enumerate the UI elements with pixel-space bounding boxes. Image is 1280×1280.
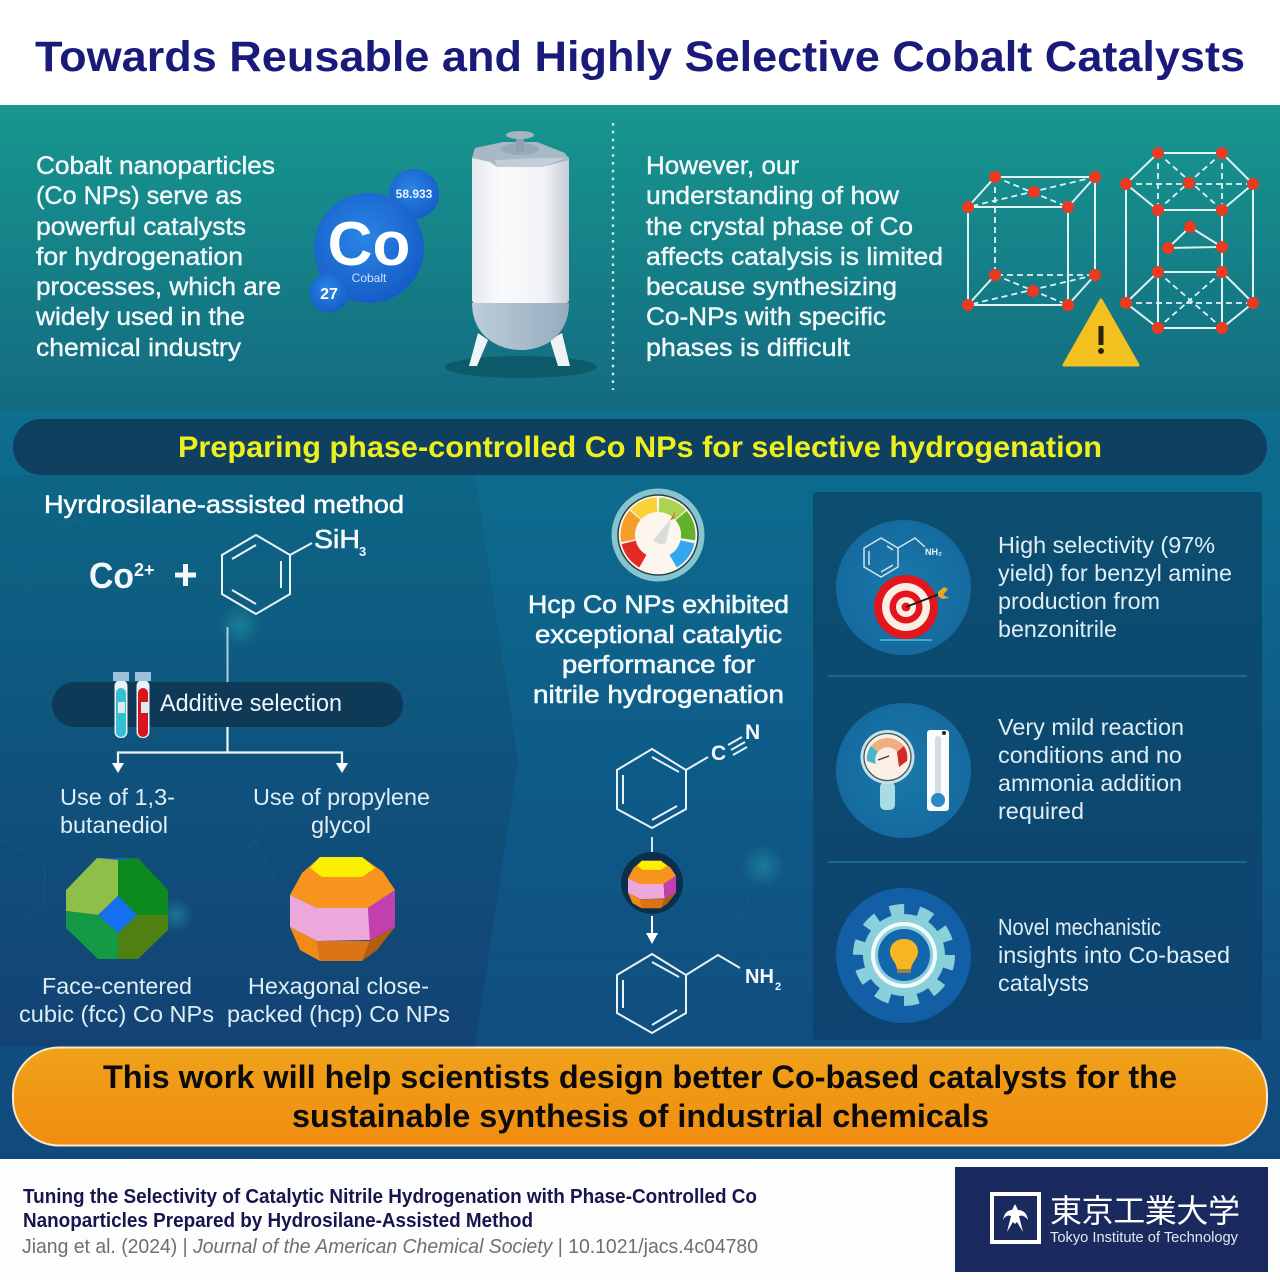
heading bar: preparing phase-controlled Co NPs: Preparing phase-controlled Co NPs for selective hydrogenation [178,431,1102,464]
reagents: Co2+ and phenylsilane [89,524,366,614]
text block: high selectivity [998,532,1232,642]
molecule: benzylamine: 2 [775,981,781,993]
icon: test tubes [113,672,151,738]
icon: cobalt element: Co [328,210,410,279]
text block: mechanistic insights: Novel mechanistic [998,914,1161,940]
label: hcp Co NPs [227,973,450,1027]
text block: mechanistic insights [998,914,1230,996]
text block: mild conditions [998,714,1184,824]
icon: hcp nanoparticle [290,857,395,961]
label: fcc Co NPs: cubic (fcc) Co NPs [19,1001,214,1027]
banner: conclusion: This work will help scientists design better Co-based catalysts for the [103,1059,1177,1095]
logo: Tokyo Institute of Technology: 東京工業大学 [1050,1193,1240,1229]
pill: additive selection: Additive selection [160,690,342,717]
dotted divider [612,123,614,390]
molecule: benzylamine [617,954,781,1033]
banner: conclusion [13,1048,1267,1146]
text block: mild conditions: required [998,798,1084,824]
icon: hcp crystal lattice [1120,147,1259,334]
title: Towards Reusable and Highly Selective Cobalt Catalysts [35,33,1245,81]
text block: high selectivity: yield) for benzyl amine [998,560,1232,586]
icon: performance gauge [612,488,704,582]
text block: cobalt nanoparticles: powerful catalysts [36,213,246,241]
label: fcc Co NPs [19,973,214,1027]
text block: mild conditions: conditions and no [998,742,1182,768]
text block: high selectivity: benzonitrile [998,616,1117,642]
reaction arrow [646,916,658,944]
citation [22,1186,758,1258]
panel: catalytic performance [528,488,789,1033]
panel: key outcomes [813,492,1262,1040]
text block: cobalt nanoparticles [35,152,281,362]
heading: method: Hyrdrosilane-assisted method [44,491,404,519]
label: propylene glycol: glycol [311,812,371,838]
banner: conclusion: sustainable synthesis of industrial chemicals [292,1098,989,1134]
label: 1,3-butanediol: Use of 1,3- [60,784,175,810]
text block: mild conditions: Very mild reaction [998,714,1184,740]
text block: mechanistic insights: insights into Co-based [998,942,1230,968]
icon: selectivity target: NH₂ [925,547,942,557]
icon: cobalt element: 58.933 [396,187,433,201]
text block: exceptional performance [528,591,789,709]
icon: pressure gauge and thermometer [836,703,971,838]
reaction stem line [651,837,653,853]
text block: exceptional performance: exceptional catalytic [535,621,782,649]
icon: cobalt element [310,169,439,312]
connector line [226,627,228,683]
text block: limited understanding: phases is difficult [646,334,850,362]
label: hcp Co NPs: Hexagonal close- [248,973,429,999]
text block: cobalt nanoparticles: (Co NPs) serve as [36,182,242,210]
label: hcp Co NPs: packed (hcp) Co NPs [227,1001,450,1027]
white title band [0,0,1280,105]
citation: Nanoparticles Prepared by Hydrosilane-Assisted Method [23,1210,533,1232]
panel: background and problem [0,105,1280,410]
text block: cobalt nanoparticles: chemical industry [36,334,242,362]
text block: cobalt nanoparticles: processes, which are [36,273,281,301]
icon: gear and light bulb [836,888,971,1023]
text block: limited understanding: However, our [646,152,799,180]
icon: reactor vessel [445,131,597,378]
label: 1,3-butanediol [60,784,175,838]
heading bar: preparing phase-controlled Co NPs [13,419,1267,475]
text block: limited understanding: the crystal phase of Co [646,213,913,241]
citation: Tuning the Selectivity of Catalytic Nitrile Hydrogenation with Phase-Controlled Co [23,1186,757,1208]
text block: exceptional performance: Hcp Co NPs exhibited [528,591,789,619]
text block: mild conditions: ammonia addition [998,770,1182,796]
icon: warning triangle [1064,300,1138,365]
text block: limited understanding: understanding of how [646,182,900,210]
footer band [0,1159,1280,1280]
panel: method and results background [0,410,1280,1160]
reagents: Co2+ and phenylsilane: SiH [314,524,360,554]
icon: fcc nanoparticle [66,858,168,959]
logo: Tokyo Institute of Technology [955,1167,1268,1272]
reagents: Co2+ and phenylsilane: 3 [359,544,366,559]
text block: mechanistic insights: catalysts [998,970,1089,996]
molecule: benzonitrile [617,721,760,828]
text block: limited understanding: affects catalysis is limited [646,243,943,271]
icon: selectivity target [836,520,971,655]
label: propylene glycol: Use of propylene [253,784,430,810]
molecule: benzylamine: NH [745,966,774,988]
text block: cobalt nanoparticles: Cobalt nanoparticles [36,152,275,180]
text block: high selectivity: production from [998,588,1160,614]
text block: exceptional performance: performance for [562,651,755,679]
branching arrows [112,727,348,773]
panel: hydrosilane-assisted method [19,491,450,1027]
citation: Jiang et al. (2024) | Journal of the American Chemical Society | 10.1021/jacs.4c04780 [22,1236,758,1258]
text block: cobalt nanoparticles: for hydrogenation [36,243,243,271]
icon: hcp catalyst particle [621,852,683,914]
text block: limited understanding: because synthesizing [646,273,897,301]
label: 1,3-butanediol: butanediol [60,812,168,838]
text block: limited understanding: Co-NPs with specific [646,303,886,331]
icon: cobalt element: Cobalt [352,271,387,285]
text block: high selectivity: High selectivity (97% [998,532,1215,558]
text block: cobalt nanoparticles: widely used in the [35,303,245,331]
reagents: Co2+ and phenylsilane: Co [89,555,134,596]
text block: limited understanding [646,152,943,362]
molecule: benzonitrile: N [745,721,760,744]
label: fcc Co NPs: Face-centered [42,973,192,999]
pill: additive selection [52,682,403,727]
logo: Tokyo Institute of Technology: Tokyo Institute of Technology [1050,1229,1238,1246]
icon: cobalt element: 27 [320,286,338,303]
text block: exceptional performance: nitrile hydrogenation [533,681,784,709]
icon: fcc crystal lattice [962,171,1101,311]
molecule: benzonitrile: C [711,742,726,765]
label: propylene glycol [253,784,430,838]
reagents: Co2+ and phenylsilane: 2+ [134,560,155,580]
